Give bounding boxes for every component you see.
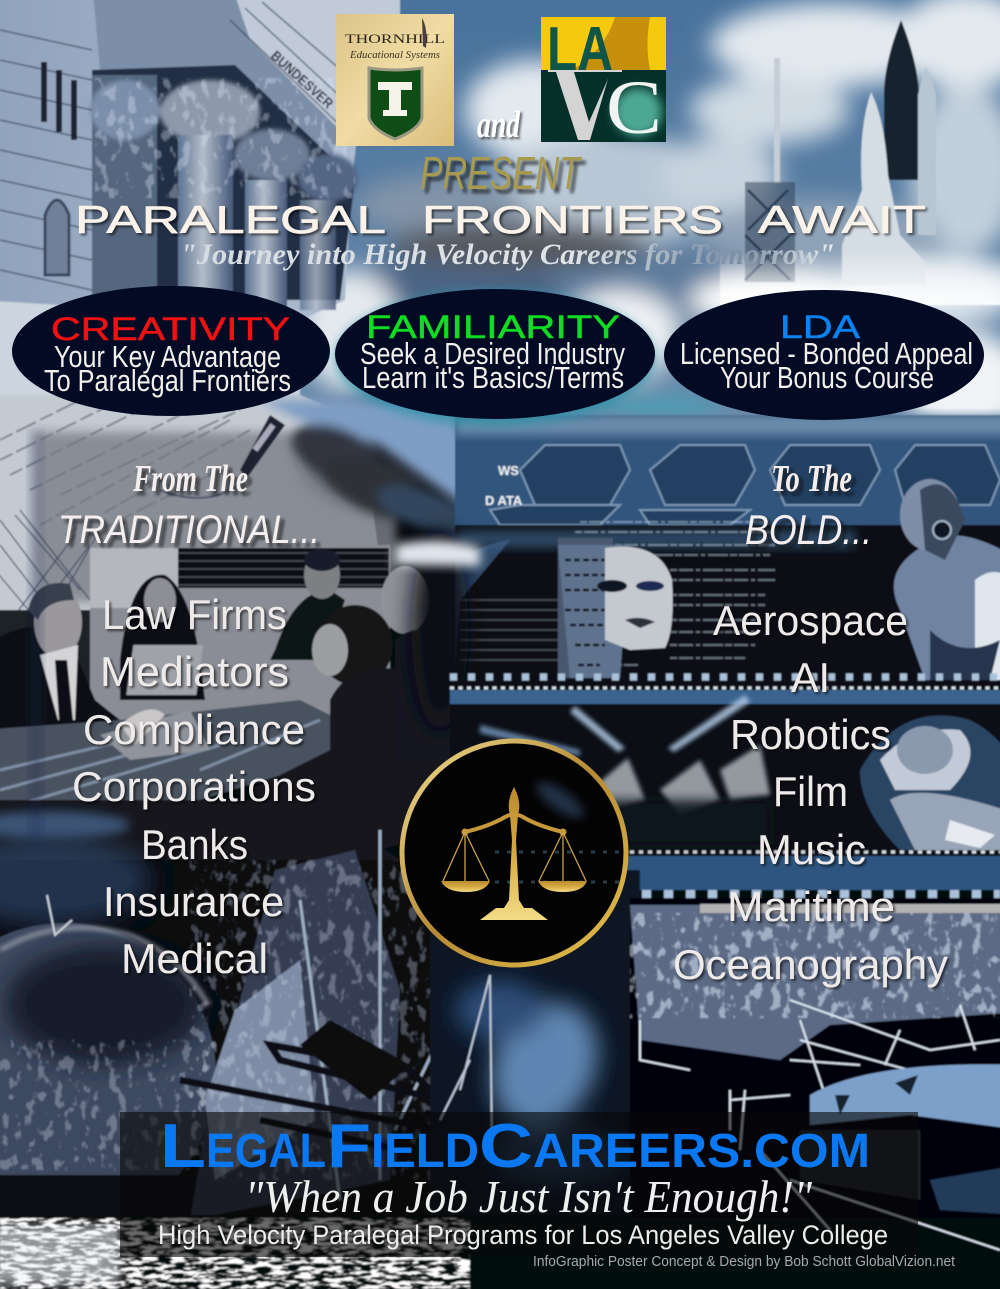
panel: LDA: Your Bonus Course	[720, 360, 934, 395]
panel: LDA	[664, 290, 984, 420]
credit: InfoGraphic Poster Concept & Design by Bob Schott GlobalVizion.net	[533, 1253, 956, 1270]
icon: scales of justice in gold ring	[402, 741, 626, 965]
website URL: C	[479, 1112, 533, 1181]
heading: from the traditional	[58, 458, 320, 552]
panel: familiarity: Seek a Desired Industry	[360, 336, 625, 371]
panel: LDA: LDA	[780, 309, 861, 345]
list: bold careers	[673, 597, 948, 988]
meeting room scene	[0, 430, 460, 1020]
ocean and center swirl	[0, 870, 1000, 1289]
heading: to the bold	[745, 458, 872, 553]
logo: Thornhill Educational Systems: THORNHILL	[345, 31, 445, 46]
website URL	[160, 1112, 870, 1181]
program line: High Velocity Paralegal Programs for Los Angeles Valley College	[158, 1220, 888, 1250]
list: traditional careers: Mediators	[100, 648, 289, 695]
list: traditional careers: Medical	[121, 935, 268, 982]
word: PRESENT: PRESENT	[420, 147, 582, 199]
heading: from the traditional: From The	[132, 458, 248, 500]
technology panel	[395, 415, 1000, 730]
panel: creativity: CREATIVITY	[51, 311, 290, 347]
list: bold careers: Oceanography	[673, 941, 948, 988]
panel: familiarity	[335, 289, 655, 426]
logo: LAVC: C	[606, 66, 662, 150]
heading: from the traditional: TRADITIONAL...	[58, 508, 320, 552]
main title: FRONTIERS	[422, 199, 723, 242]
list: bold careers: Maritime	[727, 883, 895, 930]
heading: to the bold: BOLD...	[745, 506, 872, 553]
icon: shield	[369, 68, 422, 139]
list: bold careers: AI	[791, 654, 830, 701]
main title	[75, 199, 926, 242]
engraved ship	[630, 898, 1000, 1250]
list: traditional careers	[72, 591, 316, 982]
logo: LAVC	[541, 15, 666, 150]
list: bold careers: Music	[757, 826, 866, 873]
main title: AWAIT	[758, 199, 926, 242]
panel: creativity	[12, 286, 330, 416]
building	[0, 0, 400, 330]
logo: Thornhill Educational Systems	[336, 14, 454, 146]
website URL: EGAL	[206, 1125, 326, 1178]
list: traditional careers: Law Firms	[102, 591, 287, 638]
panel: familiarity: FAMILIARITY	[366, 309, 620, 345]
panel: familiarity: Learn it's Basics/Terms	[362, 360, 624, 395]
panel: creativity: To Paralegal Frontiers	[44, 363, 291, 398]
list: traditional careers: Banks	[141, 821, 248, 868]
logo: Thornhill Educational Systems: Educational Systems	[349, 49, 440, 61]
film strips and concert	[450, 677, 1000, 894]
tagline: "When a Job Just Isn't Enough!"	[245, 1171, 813, 1222]
script word: and: and	[477, 104, 521, 146]
main title: PARALEGAL	[75, 199, 386, 242]
footer translucent panel	[120, 1112, 918, 1257]
heading: to the bold: To The	[771, 458, 852, 500]
list: bold careers: Aerospace	[713, 597, 908, 644]
sky with clouds	[300, 0, 1000, 440]
website URL: AREERS.COM	[533, 1125, 870, 1178]
rocket	[720, 20, 1000, 305]
website URL: L	[160, 1112, 206, 1181]
list: traditional careers: Corporations	[72, 763, 316, 810]
website URL: IELD	[371, 1125, 479, 1178]
list: bold careers: Robotics	[730, 711, 891, 758]
technology panel: WS	[498, 463, 519, 478]
technology panel: D ATA	[485, 493, 523, 508]
list: traditional careers: Compliance	[83, 706, 305, 753]
logo: LAVC: LA	[547, 15, 613, 84]
list: bold careers: Film	[773, 768, 848, 815]
subtitle: "Journey into High Velocity Careers for Tomorrow"	[180, 238, 835, 271]
panel: creativity: Your Key Advantage	[54, 339, 281, 374]
hand with pen	[160, 400, 490, 544]
list: traditional careers: Insurance	[103, 878, 284, 925]
website URL: F	[327, 1112, 371, 1181]
paper	[0, 395, 396, 620]
sailing ship and moon	[0, 830, 470, 1227]
building: BUNDESVER	[268, 47, 337, 111]
